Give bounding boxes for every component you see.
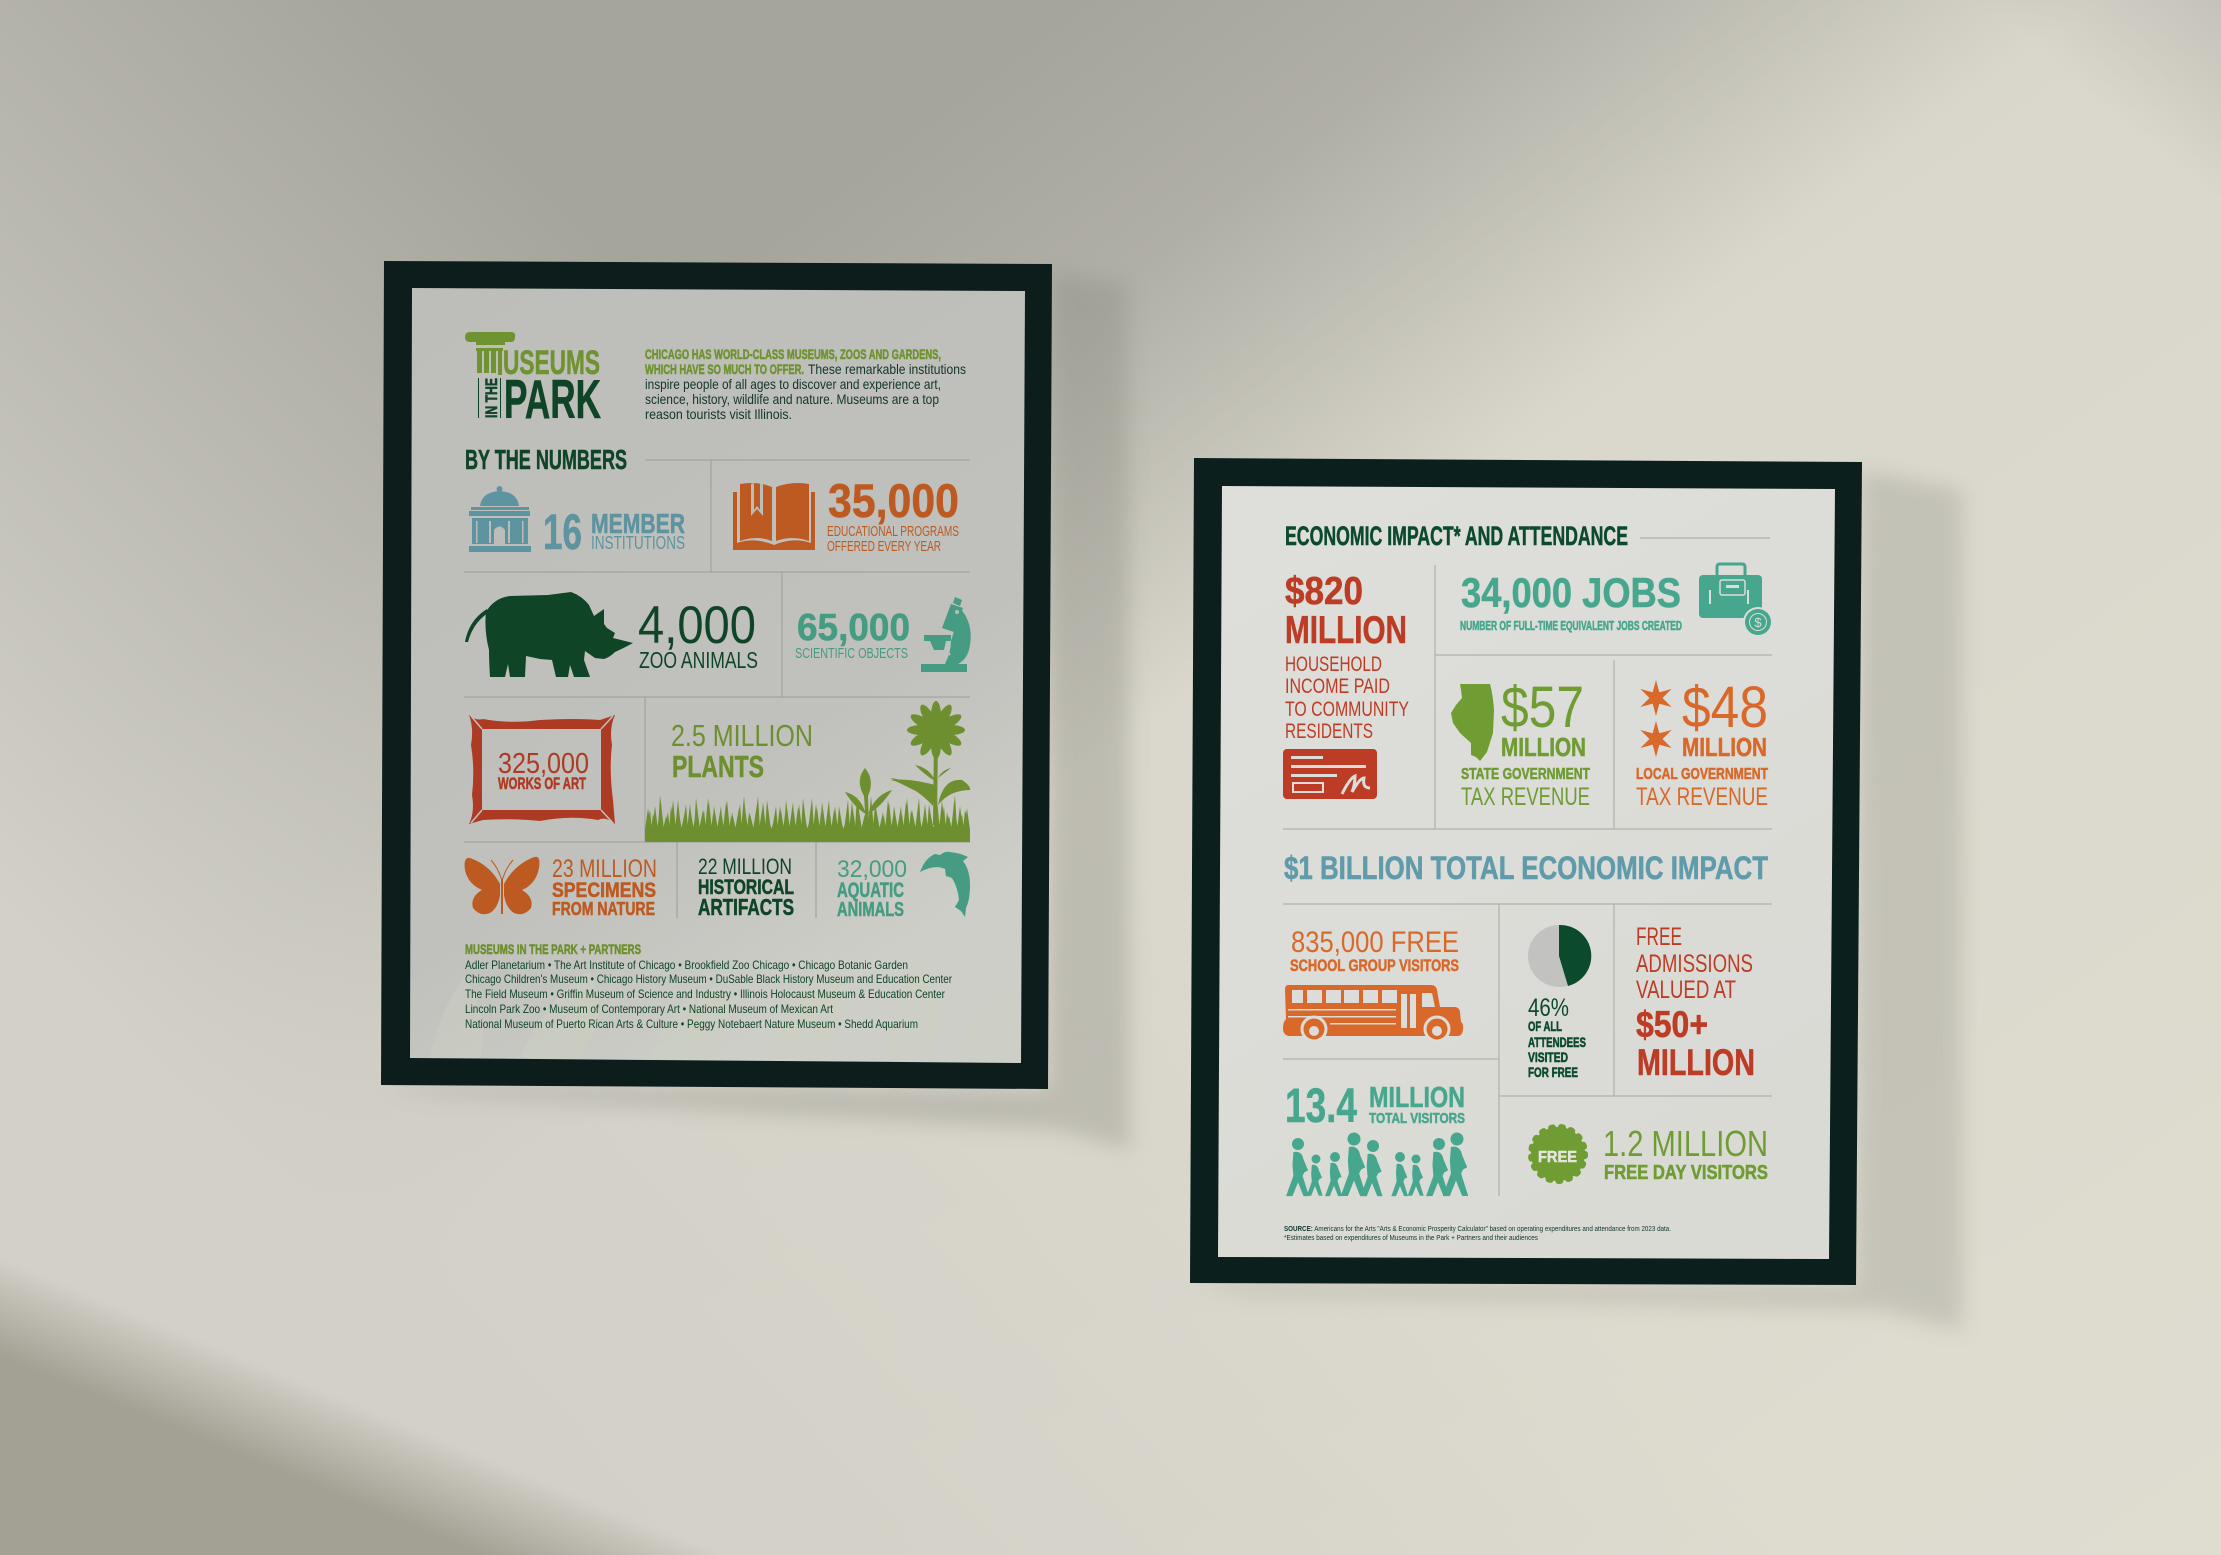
stat: 1.2 million free day visitors: 1.2 MILLION	[1603, 1123, 1768, 1164]
stat: 34,000 jobs: 34,000 JOBS	[1461, 569, 1681, 616]
stat: $820 million household income: HOUSEHOLD	[1285, 653, 1382, 676]
stat: 835,000 school group visitors: SCHOOL GROUP VISITORS	[1290, 956, 1459, 975]
intro text: These remarkable institutions	[808, 361, 966, 377]
heading: by the numbers: BY THE NUMBERS	[465, 444, 627, 475]
stat: 32,000 aquatic animals: 32,000	[837, 856, 907, 883]
heading: $1 billion total economic impact: $1 BILLION TOTAL ECONOMIC IMPACT	[1284, 850, 1768, 886]
stat: 22 million historical artifacts: 22 MILLION	[698, 854, 792, 879]
faded leaf pattern	[430, 950, 1020, 1058]
stat: 23 million specimens from nature: SPECIMENS	[552, 879, 656, 902]
stat: free admissions valued at $50+ million: VALUED AT	[1636, 976, 1736, 1004]
partners list	[465, 941, 952, 1031]
icon: free badge: FREE	[1538, 1149, 1577, 1166]
stat: 35,000 educational programs: OFFERED EVERY YEAR	[827, 538, 941, 555]
icon: dolphin	[920, 852, 970, 917]
stat: 4,000 zoo animals: 4,000	[638, 596, 756, 655]
stat: 65,000 scientific objects	[795, 597, 971, 672]
stat: 325,000 works of art: WORKS OF ART	[498, 774, 586, 793]
icon: open book	[733, 483, 815, 550]
stat: 46% of all attendees visited for free	[1528, 994, 1586, 1080]
logo: museums in the park	[465, 332, 601, 430]
stat: 16 member institutions: INSTITUTIONS	[591, 533, 685, 553]
black frame 2	[1190, 458, 1862, 1285]
icon: museum building	[469, 486, 531, 552]
stat: free admissions valued at $50+ million: FREE	[1636, 923, 1682, 951]
stat: 16 member institutions	[469, 486, 685, 560]
icon: butterfly	[465, 857, 539, 914]
icon: microscope	[921, 597, 971, 672]
intro text: WHICH HAVE SO MUCH TO OFFER.	[645, 361, 804, 377]
stat: $820 million household income: RESIDENTS	[1285, 720, 1373, 743]
stat: $820 million household income	[1283, 570, 1409, 799]
stat: 35,000 educational programs: 35,000	[828, 474, 959, 527]
stat: 2.5 million plants: PLANTS	[672, 749, 764, 784]
stat: $820 million household income: TO COMMUNITY	[1285, 698, 1409, 721]
stat: $820 million household income: MILLION	[1285, 609, 1407, 652]
stat: 22 million historical artifacts: HISTORICAL	[698, 876, 794, 899]
icon: briefcase with coin: $	[1754, 615, 1762, 630]
chart: 46% pie	[1528, 925, 1591, 987]
intro text: science, history, wildlife and nature. Museums are a top	[645, 391, 939, 407]
stat: 35,000 educational programs	[733, 474, 959, 555]
icon: chicago flag stars	[1640, 680, 1672, 757]
logo: museums in the park: IN THE	[482, 378, 501, 418]
stat: $48 million local tax revenue: MILLION	[1682, 732, 1767, 762]
stat: 2.5 million plants	[645, 701, 970, 842]
stat: 13.4 million total visitors: 13.4	[1285, 1080, 1357, 1133]
stat: $57 million state tax revenue	[1451, 675, 1590, 811]
partners list: Adler Planetarium • The Art Institute of Chicago • Brookfield Zoo Chicago • Chicago Botanic Garden	[465, 958, 908, 972]
icon: rhino	[465, 592, 633, 677]
black frame 1	[381, 261, 1052, 1089]
intro text: reason tourists visit Illinois.	[645, 406, 792, 422]
stat: $57 million state tax revenue: MILLION	[1501, 732, 1586, 762]
heading: economic impact and attendance: ECONOMIC IMPACT* AND ATTENDANCE	[1285, 521, 1628, 551]
logo: museums in the park: PARK	[504, 368, 601, 430]
stat: free admissions valued at $50+ million: MILLION	[1637, 1042, 1755, 1083]
source footnote	[1284, 1226, 1671, 1242]
intro text	[645, 346, 966, 422]
source footnote: SOURCE: Americans for the Arts "Arts & Economic Prosperity Calculator" based on operating expenditures and attendance from 2023 data.	[1284, 1226, 1671, 1233]
stat: 1.2 million free day visitors: FREE DAY VISITORS	[1604, 1162, 1768, 1184]
stat: free admissions valued at $50+ million: $50+	[1636, 1004, 1708, 1045]
stat: 46% of all attendees visited for free: 46%	[1528, 994, 1569, 1022]
stat: $48 million local tax revenue: $48	[1682, 675, 1768, 740]
frame shadows	[381, 272, 1962, 1330]
stat: 325,000 works of art	[469, 715, 615, 824]
stat: 13.4 million total visitors: TOTAL VISITORS	[1369, 1110, 1465, 1127]
poster 1 mat	[410, 288, 1025, 1063]
stat: 16 member institutions: MEMBER	[591, 508, 685, 539]
partners list: The Field Museum • Griffin Museum of Science and Industry • Illinois Holocaust Museum & Education Center	[465, 987, 945, 1001]
stat: 32,000 aquatic animals	[837, 852, 970, 921]
stat: 35,000 educational programs: EDUCATIONAL PROGRAMS	[827, 523, 959, 540]
stat: $48 million local tax revenue: LOCAL GOVERNMENT	[1636, 766, 1768, 783]
poster 2 mat	[1218, 486, 1835, 1259]
stat: 2.5 million plants: 2.5 MILLION	[671, 718, 813, 753]
partners list: National Museum of Puerto Rican Arts & Culture • Peggy Notebaert Nature Museum • Shedd Aquarium	[465, 1017, 918, 1031]
stat: 23 million specimens from nature	[465, 855, 657, 919]
stat: 32,000 aquatic animals: AQUATIC	[837, 879, 904, 902]
partners list: Lincoln Park Zoo • Museum of Contemporary Art • National Museum of Mexican Art	[465, 1002, 834, 1016]
icon: picture frame	[469, 715, 615, 824]
stat: 32,000 aquatic animals: ANIMALS	[837, 899, 904, 921]
stat: 13.4 million total visitors: MILLION	[1369, 1082, 1465, 1114]
stat: free admissions valued at $50+ million	[1636, 923, 1755, 1083]
stat: $820 million household income: INCOME PAID	[1285, 675, 1390, 698]
stat: 65,000 scientific objects: 65,000	[797, 607, 910, 649]
poster 1: by the numbers	[381, 261, 1052, 1089]
stat: 46% of all attendees visited for free: OF ALL	[1528, 1019, 1562, 1034]
partners list: MUSEUMS IN THE PARK + PARTNERS	[465, 941, 641, 957]
icon: flower and grass	[645, 701, 970, 842]
source footnote: *Estimates based on expenditures of Museums in the Park + Partners and their audiences	[1284, 1235, 1538, 1242]
stat: 1.2 million free day visitors	[1531, 1123, 1768, 1184]
intro text: CHICAGO HAS WORLD-CLASS MUSEUMS, ZOOS AND GARDENS,	[645, 346, 941, 362]
intro text: inspire people of all ages to discover and experience art,	[645, 376, 941, 392]
stat: 46% of all attendees visited for free: FOR FREE	[1528, 1065, 1578, 1080]
stat: 65,000 scientific objects: SCIENTIFIC OBJECTS	[795, 645, 908, 662]
stat: $57 million state tax revenue: STATE GOVERNMENT	[1461, 766, 1590, 783]
poster 2: economic impact	[1190, 458, 1862, 1285]
stat: 46% of all attendees visited for free: VISITED	[1528, 1050, 1568, 1065]
stat: $820 million household income: $820	[1285, 570, 1363, 613]
stat: free admissions valued at $50+ million: ADMISSIONS	[1636, 950, 1753, 978]
stat: 13.4 million total visitors	[1285, 1080, 1468, 1196]
stat: $57 million state tax revenue: TAX REVENUE	[1461, 783, 1590, 811]
logo: museums in the park: USEUMS	[503, 344, 600, 382]
icon: group of people walking	[1286, 1132, 1468, 1196]
stat: 46% of all attendees visited for free: ATTENDEES	[1528, 1035, 1586, 1050]
stat: 835,000 school group visitors: 835,000 FREE	[1291, 926, 1459, 959]
stat: $48 million local tax revenue: TAX REVENUE	[1636, 783, 1768, 811]
icon: illinois map	[1451, 684, 1494, 761]
stat: 23 million specimens from nature: 23 MILLION	[552, 855, 657, 883]
stat: $57 million state tax revenue: $57	[1501, 675, 1584, 740]
stat: 23 million specimens from nature: FROM NATURE	[552, 899, 655, 919]
icon: check	[1283, 749, 1377, 799]
stat: 34,000 jobs	[1460, 564, 1773, 637]
stat: 34,000 jobs: NUMBER OF FULL-TIME EQUIVALENT JOBS CREATED	[1460, 619, 1682, 633]
icon: briefcase with coin	[1699, 564, 1773, 637]
stat: 325,000 works of art: 325,000	[498, 748, 589, 780]
stat: 22 million historical artifacts: ARTIFACTS	[698, 894, 794, 920]
stat: 4,000 zoo animals: ZOO ANIMALS	[639, 647, 758, 673]
stat: 22 million historical artifacts	[698, 854, 794, 920]
stat: 4,000 zoo animals	[465, 592, 758, 677]
stat: 835,000 school group visitors	[1283, 926, 1463, 1041]
icon: school bus	[1283, 985, 1463, 1041]
icon: free badge	[1531, 1127, 1585, 1181]
stat: 16 member institutions: 16	[543, 504, 582, 560]
stat: $48 million local tax revenue	[1636, 675, 1768, 811]
partners list: Chicago Children's Museum • Chicago History Museum • DuSable Black History Museum and Education Center	[465, 972, 952, 986]
